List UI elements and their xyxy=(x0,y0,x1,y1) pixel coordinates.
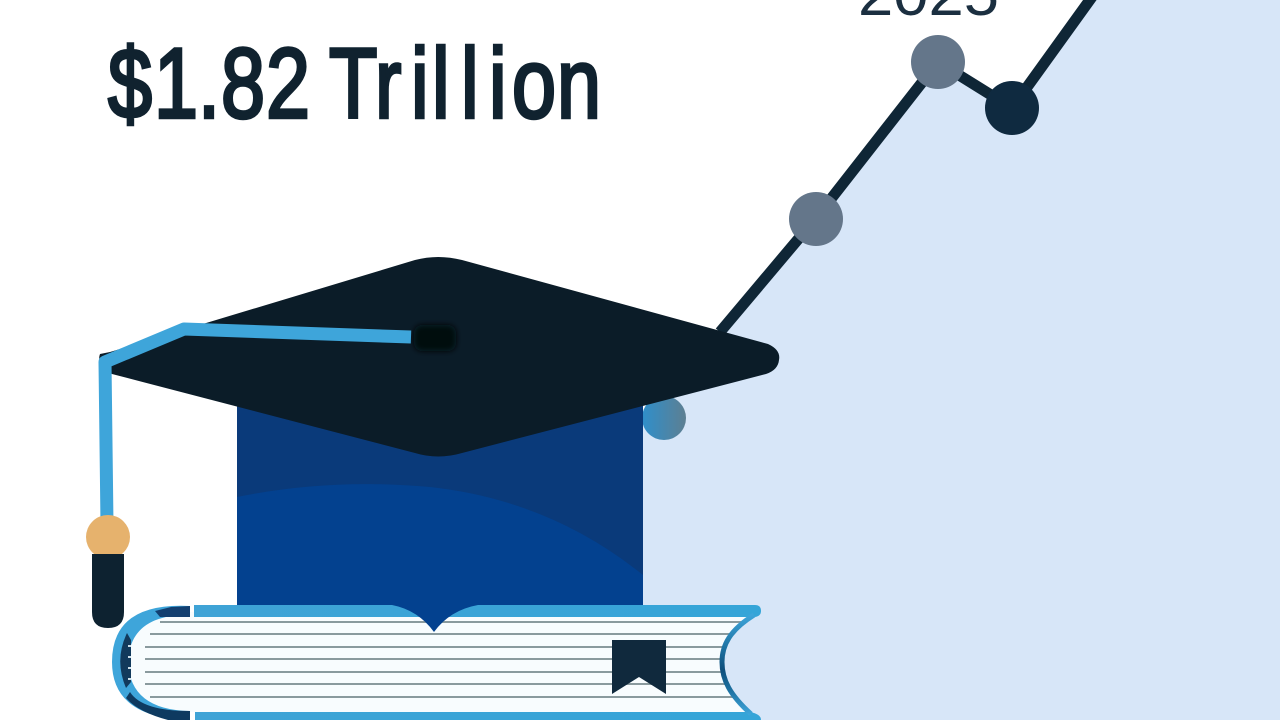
icon: graduation cap xyxy=(86,257,779,628)
book pages xyxy=(124,612,754,712)
tassel cord xyxy=(105,329,411,525)
mortarboard xyxy=(99,257,779,456)
ribbon notch xyxy=(392,605,478,632)
spine top clasp xyxy=(155,606,190,617)
data point: dark xyxy=(985,81,1039,135)
line chart xyxy=(642,0,1097,440)
spine dark detail xyxy=(120,633,131,688)
headline figure: $1.82 Trillion xyxy=(108,28,601,138)
cap base xyxy=(237,395,643,610)
data point: hidden light blue xyxy=(642,396,686,440)
book cover bottom xyxy=(195,712,761,720)
page lines xyxy=(145,622,741,697)
spine bottom shading xyxy=(126,692,190,720)
icon: book xyxy=(112,605,761,720)
button xyxy=(414,325,456,351)
spine ticks xyxy=(128,645,131,680)
data point: grey 2025 xyxy=(911,35,965,89)
book cover top xyxy=(194,605,761,617)
area chart fill xyxy=(643,0,1280,720)
tassel knot xyxy=(86,515,130,559)
bookmark xyxy=(612,640,666,694)
data point: grey lower xyxy=(789,192,843,246)
right page edge xyxy=(722,615,754,714)
tassel xyxy=(92,554,124,628)
book spine xyxy=(112,606,190,720)
